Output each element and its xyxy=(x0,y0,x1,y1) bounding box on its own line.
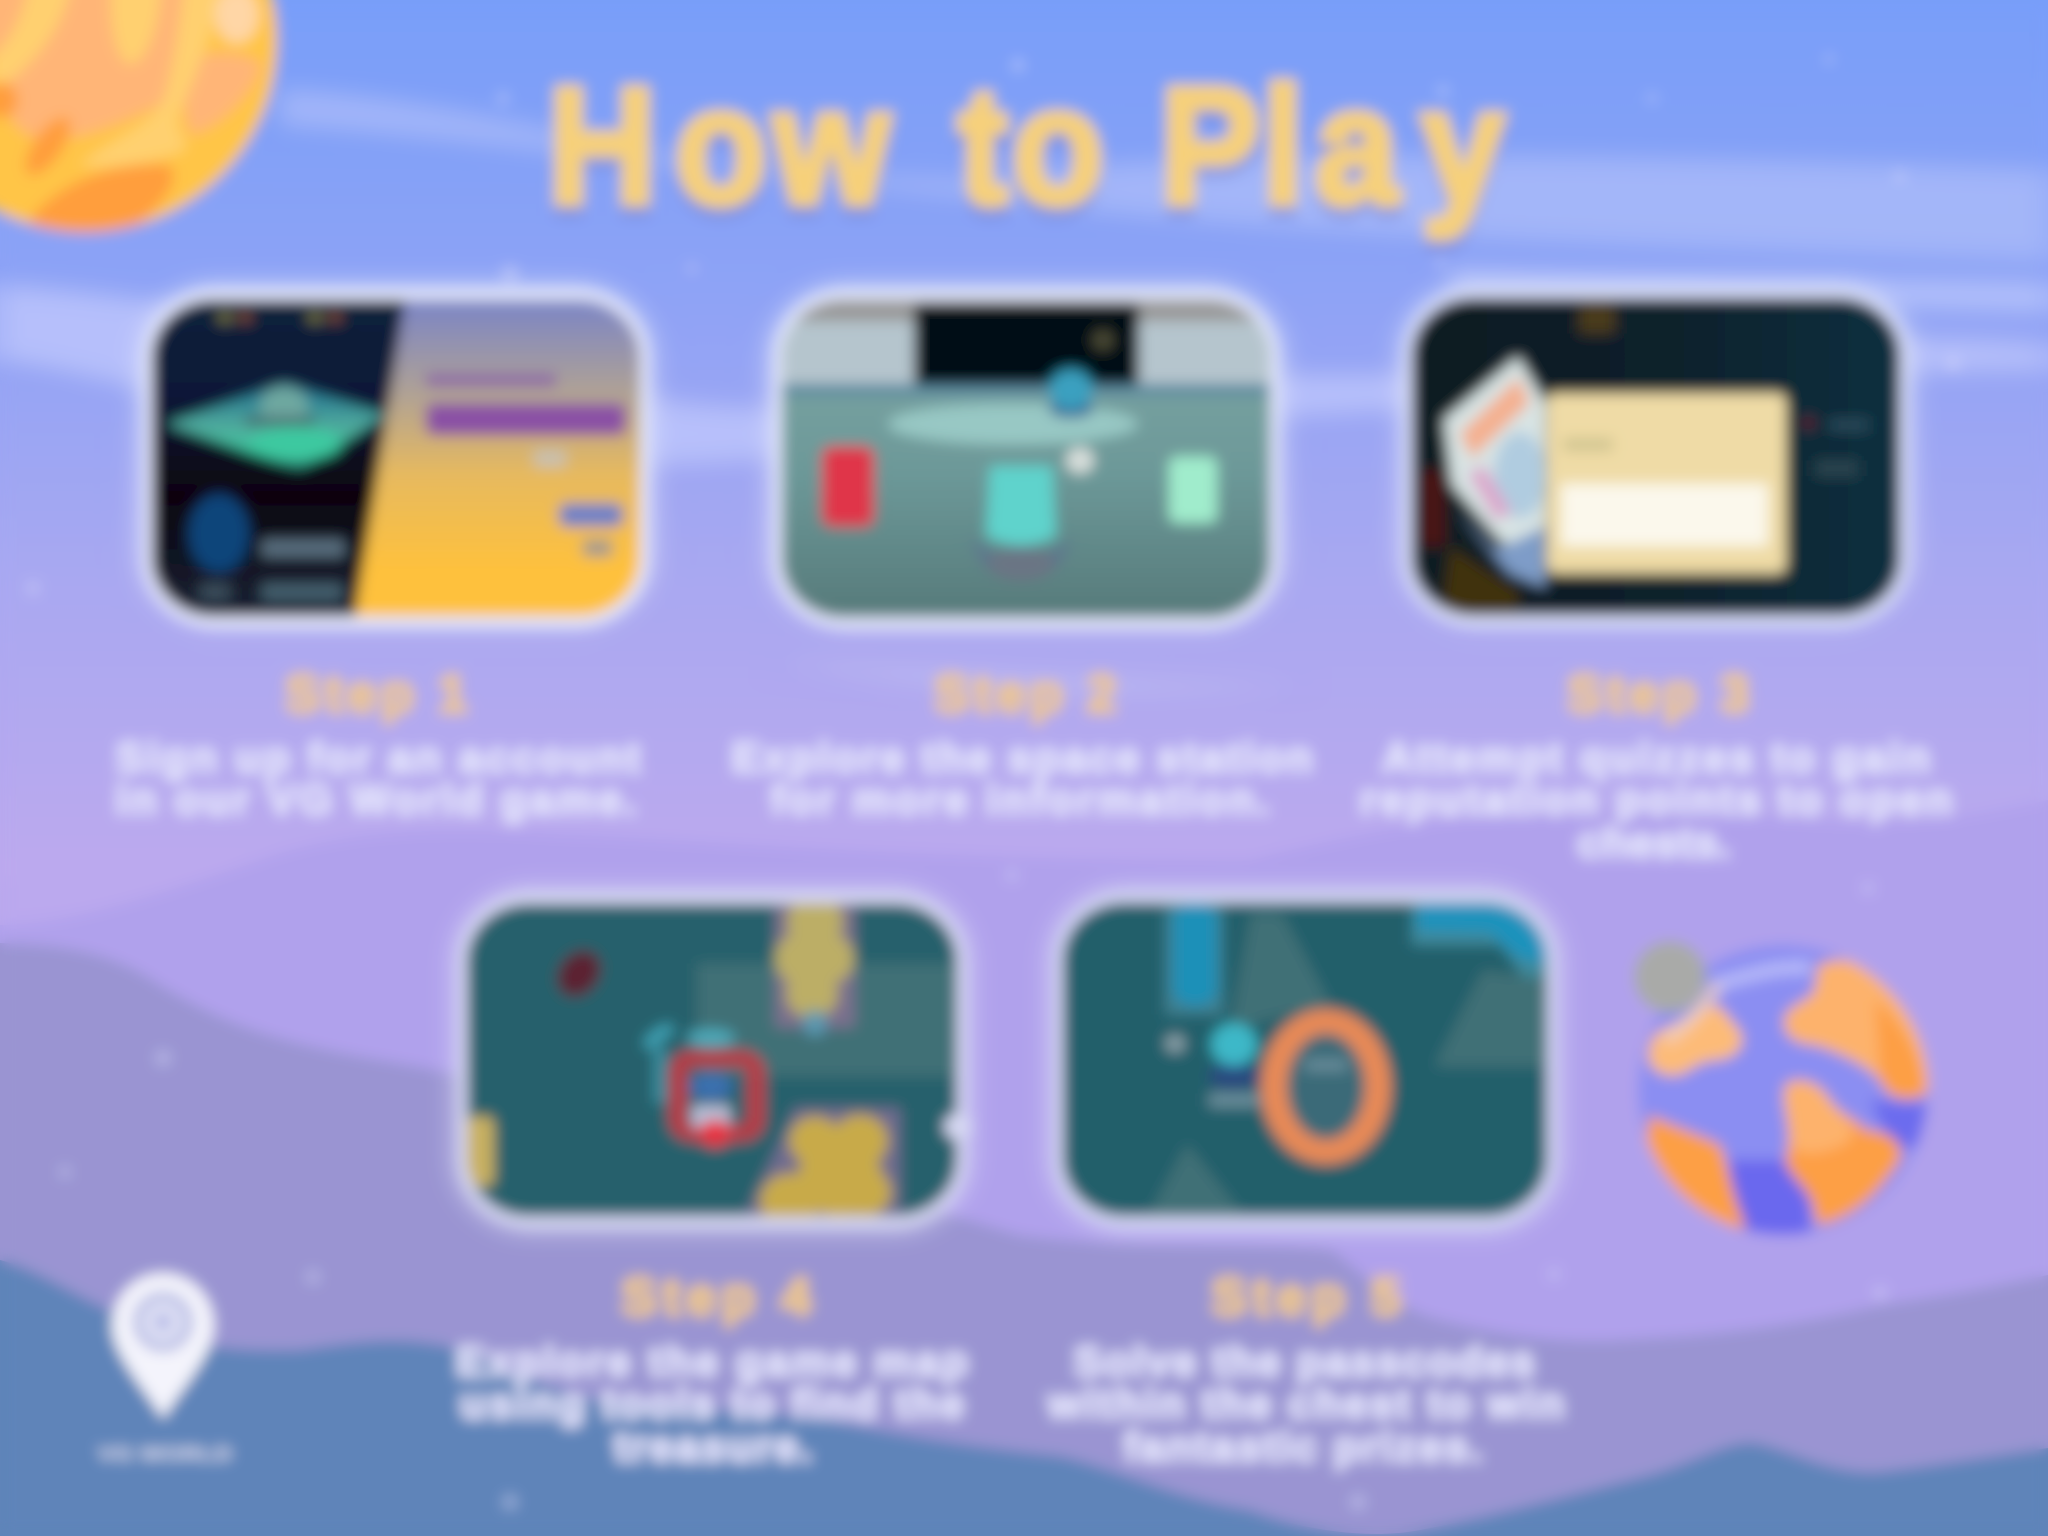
step 2 caption: Explore the space station xyxy=(732,734,1312,782)
card: step 1 screenshot xyxy=(135,281,657,627)
title: How to Play xyxy=(548,64,1504,250)
step 1 caption: in our VG World game. xyxy=(116,776,636,824)
step 2 caption: Step 2 xyxy=(934,664,1116,724)
step 5 caption: Solve the passcodes xyxy=(1074,1338,1534,1386)
step 3 caption: Step 3 xyxy=(1566,664,1750,724)
step 1 caption xyxy=(116,664,640,824)
step 1 caption: Step 1 xyxy=(284,664,468,724)
step 3 caption: Attempt quizzes to gain xyxy=(1382,734,1930,782)
card: step 5 screenshot xyxy=(1046,884,1564,1235)
step 2 caption xyxy=(732,664,1312,824)
card: step 2 screenshot xyxy=(765,281,1287,628)
step 3 caption xyxy=(1360,664,1952,867)
icon: earth with moon xyxy=(1634,941,1935,1245)
step 4 caption: treasure. xyxy=(614,1423,812,1471)
icon: location pin logo: VG WORLD xyxy=(98,1444,232,1464)
planet: sun top left xyxy=(0,0,277,240)
title: How to Play xyxy=(548,53,1504,239)
card: step 4 screenshot xyxy=(450,885,974,1235)
step 5 caption: Step 5 xyxy=(1211,1267,1401,1327)
step 3 caption: chests. xyxy=(1578,819,1730,867)
step 1 caption: Sign up for an account xyxy=(116,734,640,782)
step 4 caption: Explore the game map xyxy=(456,1338,968,1386)
step 4 caption: using tools to find the xyxy=(460,1380,964,1428)
step 5 caption: within the chest to win xyxy=(1047,1380,1564,1428)
card: step 3 screenshot xyxy=(1395,279,1917,627)
step 5 caption xyxy=(1047,1267,1564,1471)
icon: location pin logo xyxy=(98,1273,232,1464)
step 2 caption: for more information. xyxy=(770,776,1270,824)
step 3 caption: reputation points to open xyxy=(1360,776,1952,824)
step 4 caption: Step 4 xyxy=(621,1267,811,1327)
step 4 caption xyxy=(456,1267,968,1471)
step 5 caption: fantastic prizes. xyxy=(1124,1423,1482,1471)
